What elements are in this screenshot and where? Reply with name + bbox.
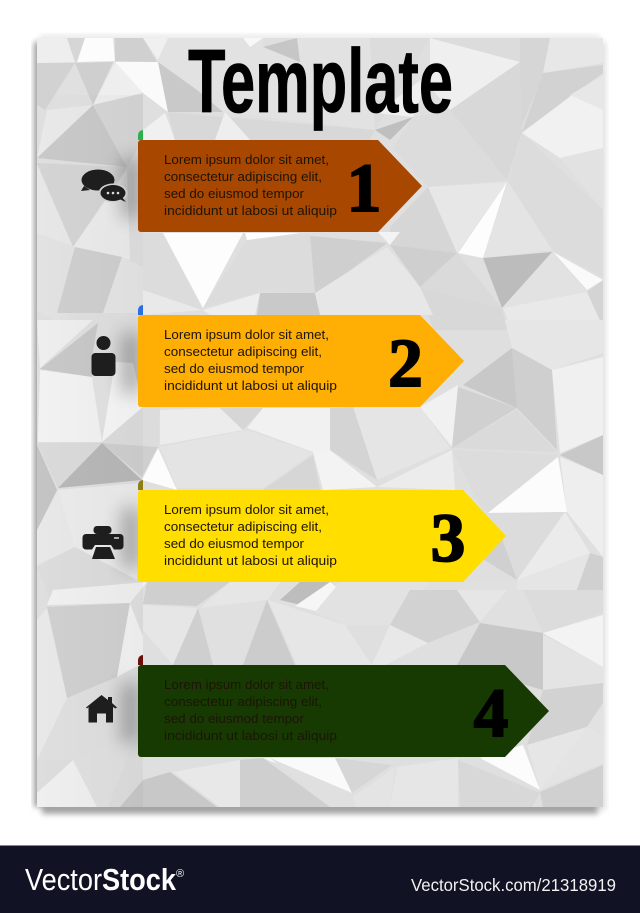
icon: printer <box>82 526 124 559</box>
arrow shape 3 <box>138 490 506 582</box>
text block 1: incididunt ut labosi ut aliquip <box>164 204 337 218</box>
icon: chat bubbles <box>81 170 128 202</box>
arrow shape 2 <box>138 315 464 407</box>
text block 4: incididunt ut labosi ut aliquip <box>164 729 337 743</box>
registered mark: ® <box>176 868 184 880</box>
page drop shadow <box>34 35 606 814</box>
tab: green <box>138 130 143 140</box>
text block 2: sed do eiusmod tempor <box>164 362 304 376</box>
text block 1: Lorem ipsum dolor sit amet, <box>164 153 329 167</box>
number 3: 3 <box>431 500 465 576</box>
number 4: 4 <box>474 675 508 751</box>
text block 2: consectetur adipiscing elit, <box>164 345 322 359</box>
footer banner <box>0 845 640 913</box>
text block 4: Lorem ipsum dolor sit amet, <box>164 678 329 692</box>
text block 3 <box>164 503 337 568</box>
low-poly background panel <box>37 38 603 807</box>
text block 2: Lorem ipsum dolor sit amet, <box>164 328 329 342</box>
text block 3: sed do eiusmod tempor <box>164 537 304 551</box>
tab: blue <box>138 305 143 315</box>
text block 4 <box>164 678 337 743</box>
text block 3: Lorem ipsum dolor sit amet, <box>164 503 329 517</box>
step 1 arrow panel <box>138 130 422 232</box>
text block 2: incididunt ut labosi ut aliquip <box>164 379 337 393</box>
tab: dark red <box>138 655 143 665</box>
text block 3: incididunt ut labosi ut aliquip <box>164 554 337 568</box>
VectorStock logo: VectorStock <box>25 862 177 897</box>
text block 4: sed do eiusmod tempor <box>164 712 304 726</box>
text block 3: consectetur adipiscing elit, <box>164 520 322 534</box>
title: Template <box>188 32 453 132</box>
icon: house <box>86 695 117 722</box>
step 4 arrow panel <box>138 655 549 757</box>
step 3 arrow panel <box>138 480 506 582</box>
icon: person <box>92 336 116 376</box>
step 2 arrow panel <box>138 305 464 407</box>
number 1: 1 <box>347 150 381 226</box>
text block 1 <box>164 153 337 218</box>
arrow shape 4 <box>138 665 549 757</box>
image id: VectorStock.com/21318919 <box>411 875 616 895</box>
text block 2 <box>164 328 337 393</box>
text block 4: consectetur adipiscing elit, <box>164 695 322 709</box>
arrow shape 1 <box>138 140 422 232</box>
text block 1: sed do eiusmod tempor <box>164 187 304 201</box>
tab: olive <box>138 480 143 490</box>
number 2: 2 <box>388 325 423 401</box>
text block 1: consectetur adipiscing elit, <box>164 170 322 184</box>
